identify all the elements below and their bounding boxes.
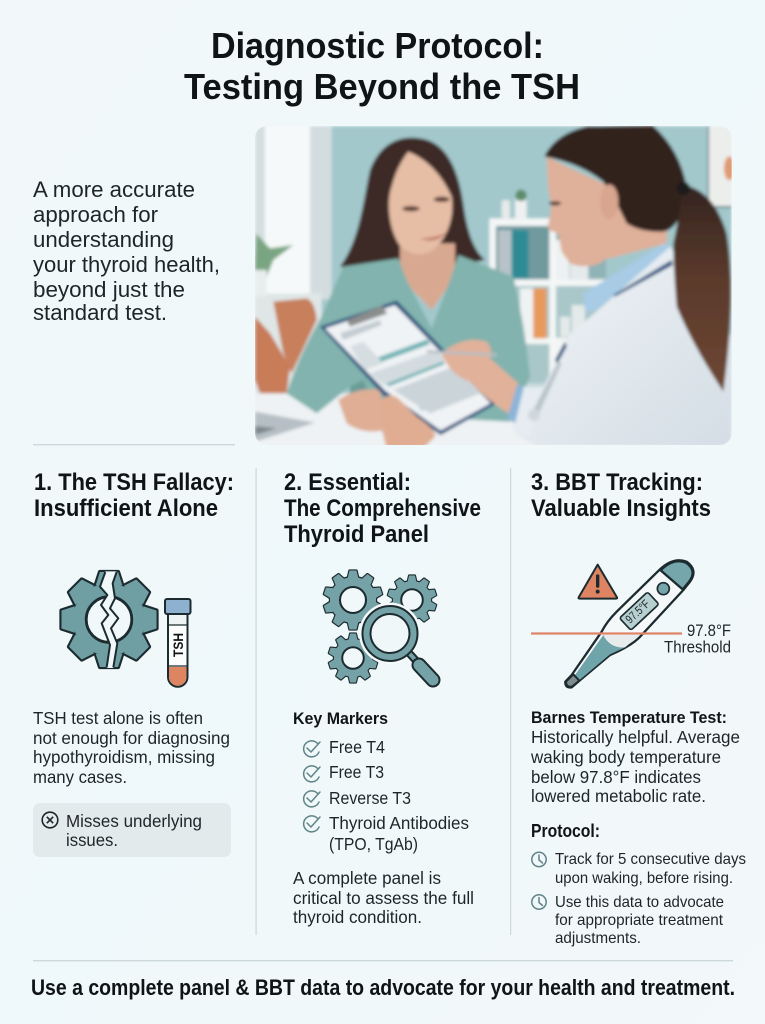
icon: thermometer (565, 560, 693, 687)
checklist: key markers (304, 737, 469, 854)
icon: x circle (42, 812, 58, 828)
panel: comprehensive thyroid panel (284, 469, 481, 927)
Barnes temperature test text: below 97.8°F indicates (531, 767, 701, 787)
body text: thyroid condition. (293, 907, 422, 927)
icon: TSH test tube: TSH (170, 633, 186, 657)
Barnes temperature test text (530, 708, 740, 806)
heading: comprehensive panel: The Comprehensive (284, 495, 481, 522)
title: Testing Beyond the TSH (184, 66, 580, 107)
title (184, 25, 580, 107)
protocol steps: upon waking, before rising. (555, 870, 733, 887)
body text: not enough for diagnosing (33, 728, 230, 748)
threshold line and label (531, 622, 731, 656)
icon: clock (532, 852, 546, 867)
body text: A complete panel is (293, 868, 441, 888)
icon: TSH test tube (165, 599, 190, 687)
heading: comprehensive panel (284, 469, 481, 548)
checklist: key markers: Reverse T3 (329, 788, 411, 808)
intro text: approach for (33, 202, 158, 227)
checklist: key markers: (TPO, TgAb) (329, 834, 418, 854)
Barnes temperature test text: waking body temperature (530, 747, 721, 767)
Barnes temperature test text: Barnes Temperature Test: (531, 708, 727, 727)
checklist: key markers: Free T3 (329, 762, 384, 782)
body text: many cases. (33, 767, 127, 787)
intro text: A more accurate (33, 177, 195, 202)
heading: BBT tracking: 3. BBT Tracking: (531, 469, 703, 496)
protocol steps (532, 851, 746, 947)
callout: misses underlying issues: Misses underlying (66, 811, 202, 831)
protocol heading: Protocol: (531, 821, 600, 841)
panel: TSH fallacy (33, 469, 234, 857)
icon: clock (532, 895, 546, 909)
heading: BBT tracking (531, 469, 711, 522)
Barnes temperature test text: lowered metabolic rate. (531, 786, 706, 806)
protocol steps: Use this data to advocate (555, 894, 724, 911)
heading: comprehensive panel: 2. Essential: (284, 469, 411, 496)
protocol steps: adjustments. (555, 930, 641, 947)
intro text: standard test. (33, 300, 167, 325)
divider (33, 444, 235, 445)
key markers heading: Key Markers (293, 709, 388, 728)
body text: TSH test alone is often (33, 708, 203, 728)
intro text: beyond just the (33, 277, 185, 302)
icon: gears and magnifier (323, 570, 437, 682)
icon: warning triangle (578, 565, 617, 599)
heading: comprehensive panel: Thyroid Panel (284, 521, 429, 548)
body text: critical to assess the full (293, 888, 474, 908)
heading: TSH fallacy (34, 469, 234, 522)
intro text: your thyroid health, (33, 252, 220, 277)
body text: hypothyroidism, missing (33, 747, 215, 767)
threshold line and label: Threshold (664, 638, 731, 656)
body text (293, 868, 474, 927)
callout: misses underlying issues (33, 803, 231, 857)
body text (33, 708, 230, 787)
heading: TSH fallacy: Insufficient Alone (34, 495, 218, 522)
intro text (33, 177, 220, 325)
panel: BBT tracking (530, 469, 746, 947)
photo: doctor reviewing chart with patient (255, 126, 735, 448)
icon: thermometer: 97.5°F (622, 597, 653, 626)
Barnes temperature test text: Historically helpful. Average (531, 727, 740, 747)
callout: misses underlying issues: issues. (66, 830, 118, 850)
heading: TSH fallacy: 1. The TSH Fallacy: (34, 469, 234, 496)
title: Diagnostic Protocol: (211, 25, 544, 66)
checklist: key markers: Free T4 (329, 737, 385, 757)
icon: broken gear (61, 571, 157, 668)
checklist: key markers: Thyroid Antibodies (329, 813, 469, 833)
heading: BBT tracking: Valuable Insights (531, 495, 711, 522)
threshold line and label: 97.8°F (687, 622, 731, 640)
protocol steps: Track for 5 consecutive days (555, 851, 746, 868)
protocol steps: for appropriate treatment (555, 912, 724, 929)
intro text: understanding (33, 227, 174, 252)
